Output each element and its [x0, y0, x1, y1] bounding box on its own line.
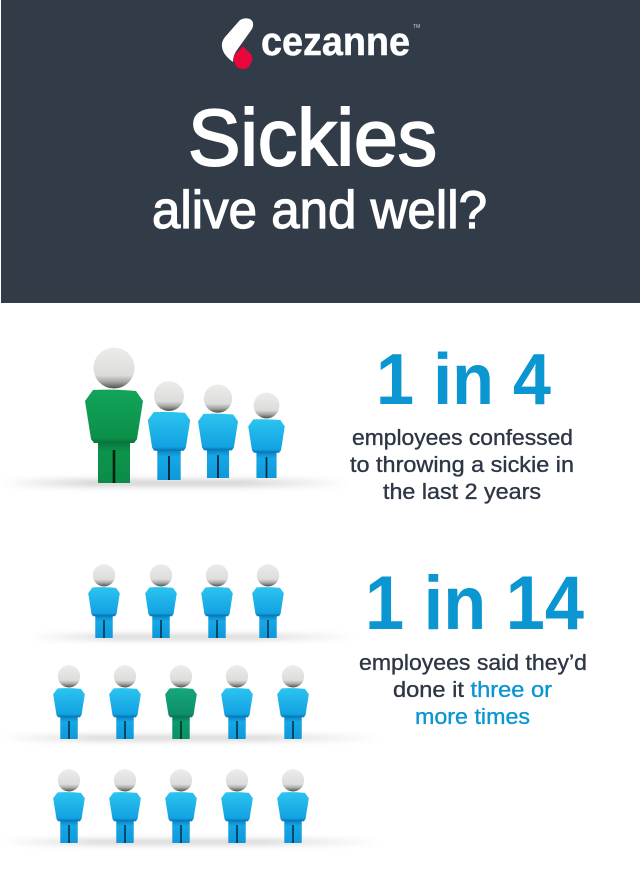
header panel [1, 0, 640, 303]
stat description: to throwing a sickie in [350, 452, 574, 477]
group two: figures [0, 564, 380, 845]
row three figures [53, 769, 309, 843]
title: Sickies [188, 93, 437, 182]
stat description: employees confessed [352, 425, 573, 450]
stat description: the last 2 years [383, 479, 541, 504]
subtitle: alive and well? [152, 181, 487, 240]
stat description: done it three or [393, 677, 552, 702]
logo wordmark: cezanne [261, 20, 410, 64]
group one: figures [0, 348, 350, 487]
row two shadow [0, 735, 380, 741]
stat number: 1 in 14 [365, 561, 584, 646]
stat number: 1 in 4 [376, 340, 551, 420]
row one shadow [30, 634, 355, 640]
row one figures [88, 564, 284, 638]
ground shadow [0, 479, 350, 487]
blue figure [248, 393, 285, 478]
stat description [359, 650, 587, 729]
stat one [350, 340, 574, 504]
logo [222, 18, 420, 69]
trademark: TM [413, 24, 420, 30]
green figure [85, 348, 143, 483]
row three shadow [0, 839, 380, 845]
stat description: more times [415, 704, 530, 729]
stat description: employees said they’d [359, 650, 587, 675]
stat description [350, 425, 574, 504]
stat two [359, 561, 587, 729]
blue figure [148, 381, 190, 480]
row two figures [53, 665, 309, 739]
blue figure [198, 385, 238, 478]
logo mark [222, 18, 253, 69]
